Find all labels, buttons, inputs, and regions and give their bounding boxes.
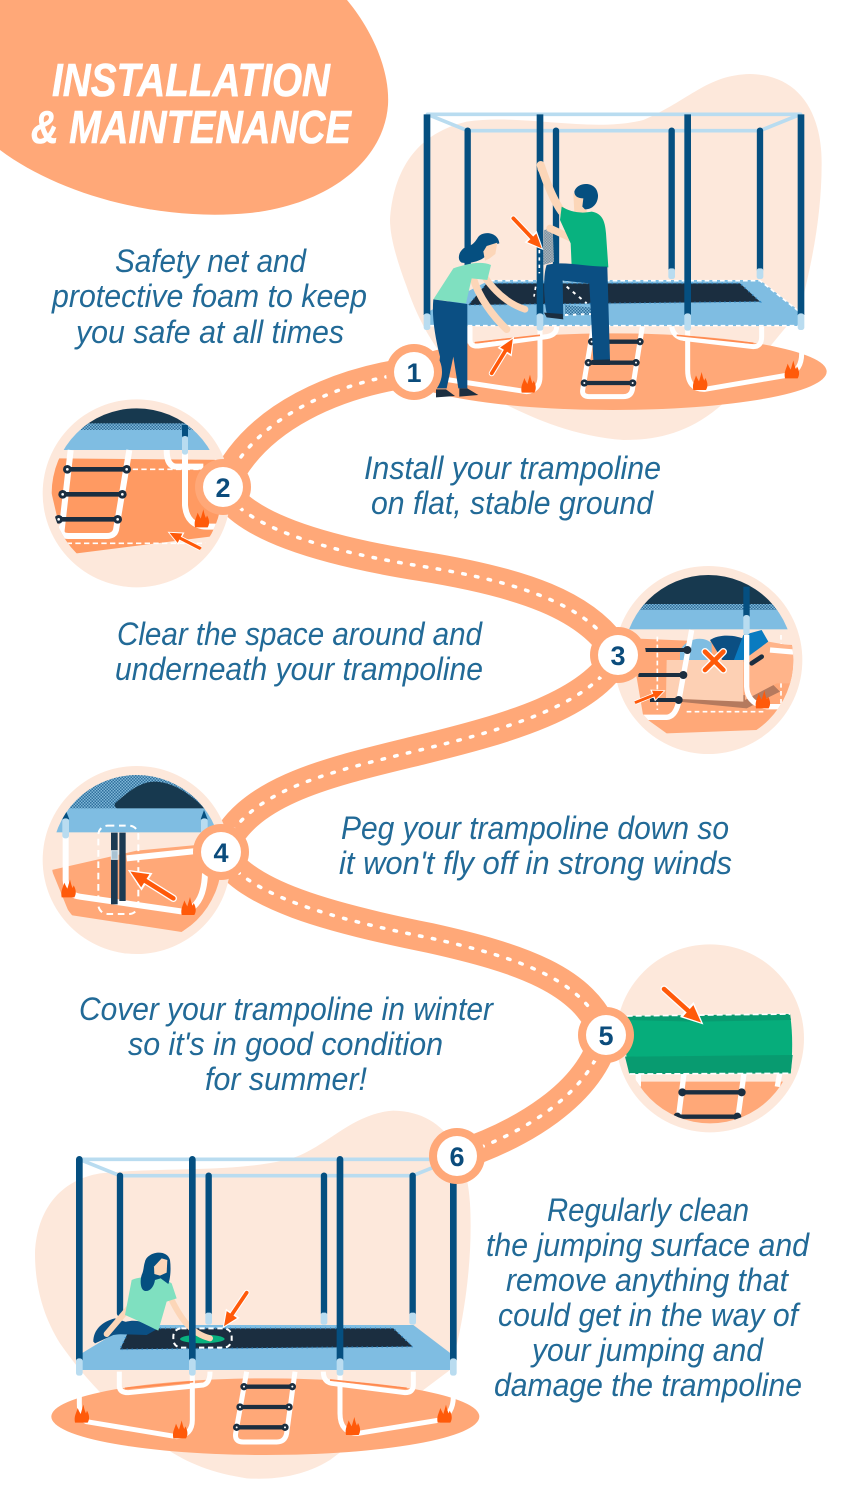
step marker 2: 2 (215, 473, 231, 503)
back poles and frame (79, 1159, 453, 1325)
text: regular cleaning: damage the trampoline (494, 1367, 802, 1403)
text: winter cover: so it's in good condition (128, 1026, 443, 1062)
text: regular cleaning: the jumping surface and (486, 1227, 810, 1263)
arrows (485, 213, 549, 378)
text: safety net: protective foam to keep (51, 278, 367, 314)
illustration: step 1 couple installing net on trampoline (390, 74, 827, 440)
mat (82, 1325, 451, 1370)
vignette: step 5 winter cover (616, 944, 804, 1132)
mat (428, 280, 800, 326)
text: winter cover (79, 991, 494, 1097)
text: safety net (51, 243, 367, 350)
step marker 2 (195, 459, 251, 515)
step marker 4: 4 (213, 838, 229, 868)
text: regular cleaning (486, 1192, 810, 1403)
title: & MAINTENANCE (31, 101, 352, 153)
text: peg down (339, 810, 732, 881)
vignette: step 2 clear ground (42, 399, 228, 588)
vignette: step 4 pegging down (43, 766, 231, 954)
front poles (424, 114, 804, 331)
step marker 6: 6 (449, 1142, 465, 1172)
text: safety net: Safety net and (115, 243, 307, 279)
back poles and frame (427, 114, 801, 279)
text: flat ground (364, 450, 661, 521)
text: flat ground: on flat, stable ground (371, 485, 654, 521)
step marker 5: 5 (598, 1021, 614, 1051)
title (31, 54, 352, 153)
man climbing (537, 162, 610, 365)
text: flat ground: Install your trampoline (364, 450, 661, 486)
icon: red cross (705, 652, 723, 670)
vignette: step 3 box under trampoline (613, 566, 807, 754)
arrow (216, 1288, 254, 1333)
text: peg down: Peg your trampoline down so (341, 810, 729, 846)
step marker 4 (193, 824, 249, 880)
text: winter cover: Cover your trampoline in winter (79, 991, 494, 1027)
net and foam being fitted (543, 228, 612, 315)
front poles (76, 1159, 457, 1376)
text: regular cleaning: could get in the way of (498, 1297, 801, 1333)
header blob with title (0, 0, 388, 215)
text: peg down: it won't fly off in strong winds (339, 845, 732, 881)
step marker 1: 1 (406, 358, 422, 388)
title: INSTALLATION (52, 54, 331, 106)
step marker 5 (578, 1007, 634, 1063)
step marker 3 (590, 627, 646, 683)
winding path linking the steps (221, 372, 618, 1156)
text: clear the space (115, 616, 483, 687)
step marker 3: 3 (610, 641, 626, 671)
woman adjusting mat (433, 233, 525, 397)
illustration: step 6 cleaning the jumping surface (35, 1111, 479, 1479)
text: regular cleaning: Regularly clean (547, 1192, 749, 1228)
text: regular cleaning: your jumping and (530, 1332, 764, 1368)
woman cleaning (93, 1253, 210, 1343)
text: clear the space: Clear the space around and (117, 616, 483, 652)
step marker 1 (386, 344, 442, 400)
text: regular cleaning: remove anything that (506, 1262, 789, 1298)
text: winter cover: for summer! (205, 1061, 367, 1097)
text: safety net: you safe at all times (74, 314, 344, 350)
text: clear the space: underneath your trampoline (115, 651, 483, 687)
step marker 6 (429, 1128, 485, 1184)
